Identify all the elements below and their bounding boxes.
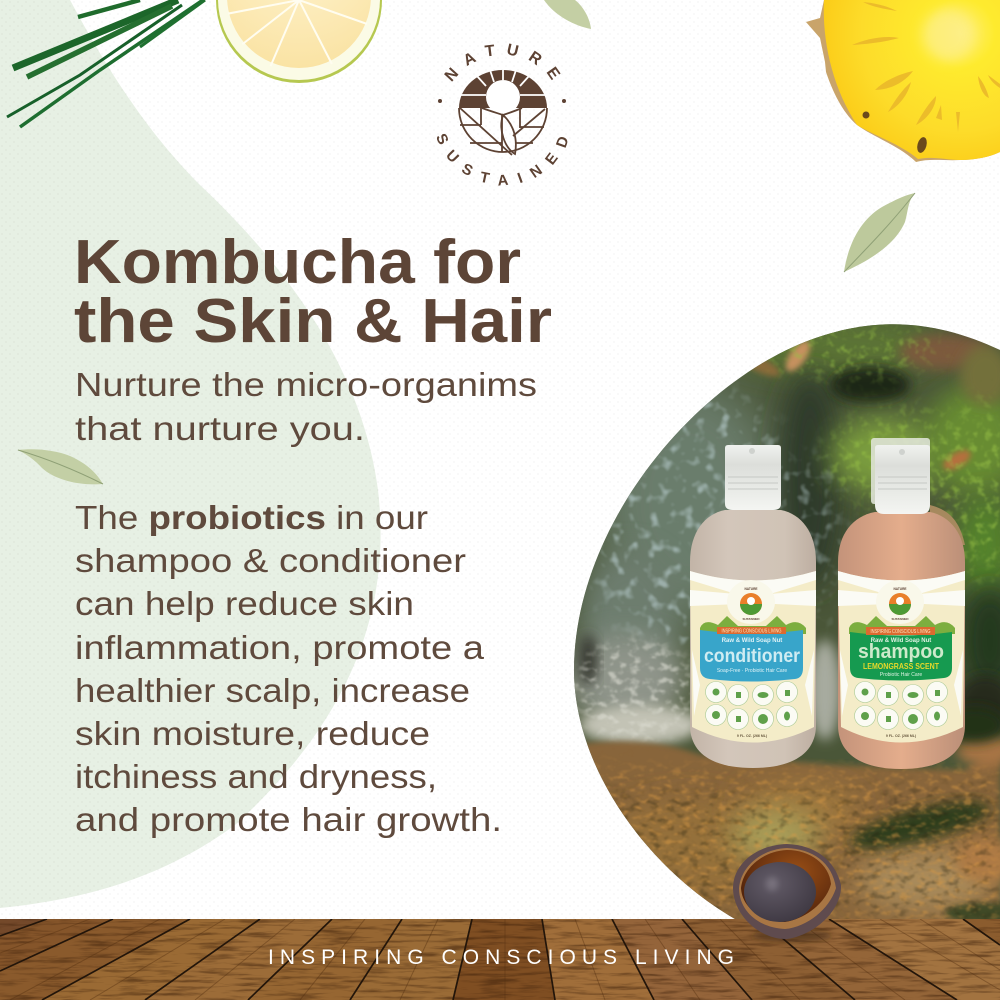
shampoo foliage [849, 616, 955, 634]
shampoo badges [854, 682, 948, 730]
heading: Kombucha for [74, 228, 521, 297]
shampoo orange strip [866, 627, 935, 635]
pale green curved shape [0, 0, 381, 908]
bottle: conditioner: Raw & Wild Soap Nut [722, 638, 782, 644]
logo wordmark: NATURE [444, 44, 560, 82]
body text [75, 499, 502, 838]
bottle: shampoo: INSPIRING CONSCIOUS LIVING [870, 629, 931, 635]
leaf: top centre [544, 0, 591, 29]
leaf: right [844, 193, 915, 272]
conditioner label [690, 571, 816, 742]
photo moss texture [760, 325, 1000, 580]
heading [74, 228, 552, 356]
shampoo ghost backing [871, 438, 965, 545]
plank gaps [0, 919, 1000, 1000]
photo rock [570, 707, 1000, 925]
conditioner mini logo [740, 587, 762, 621]
body text: healthier scalp, increase [75, 672, 470, 709]
photo splashing water [565, 634, 841, 745]
bottle: shampoo: 9 FL. OZ. (266 ML) [886, 734, 916, 738]
body text: The probiotics in our [75, 499, 428, 536]
bottle: conditioner: Soap-Free · Probiotic Hair Care [717, 668, 787, 674]
photo foliage and bokeh [580, 315, 1000, 735]
conditioner foliage [700, 616, 806, 634]
shampoo green band [850, 632, 952, 680]
conditioner badges [706, 682, 798, 730]
lemongrass blades [7, 0, 205, 127]
heading: the Skin & Hair [74, 287, 552, 356]
conditioner blue band [700, 630, 803, 682]
bottle: shampoo: shampoo [858, 641, 944, 663]
shampoo cap [875, 445, 930, 514]
soap nut [733, 844, 841, 942]
photo: mossy rock and water [560, 310, 1000, 925]
body text: and promote hair growth. [75, 801, 502, 838]
wood planks [0, 919, 1000, 1000]
logo lower wordmark: SUSTAINED [437, 134, 568, 186]
bottle: shampoo [838, 438, 965, 769]
body text: can help reduce skin [75, 585, 414, 622]
leaf: left [18, 449, 103, 484]
wood grain streaks [0, 919, 1000, 1000]
conditioner cap [725, 445, 781, 510]
pineapple slits [852, 2, 1000, 132]
shampoo body [838, 512, 965, 769]
body text: itchiness and dryness, [75, 758, 437, 795]
logo: Nature Sustained [437, 44, 568, 186]
bottle: conditioner: 9 FL. OZ. (266 ML) [737, 734, 767, 738]
bottle: conditioner: INSPIRING CONSCIOUS LIVING [722, 628, 782, 634]
logo emblem [455, 70, 551, 155]
photo pale bokeh dots [585, 385, 795, 655]
subheading: Nurture the micro-organims [75, 366, 537, 403]
bottle: shampoo: LEMONGRASS SCENT [863, 662, 939, 671]
logo separator dots [438, 99, 566, 103]
body text: skin moisture, reduce [75, 715, 430, 752]
wooden floor [0, 919, 1000, 1000]
body text: inflammation, promote a [75, 629, 485, 666]
shampoo label [838, 571, 965, 742]
pineapple dark eyes [862, 112, 928, 154]
pineapple slice [806, 0, 1000, 162]
conditioner body [690, 510, 816, 768]
conditioner mini logo: NATURE [744, 587, 758, 591]
body text: shampoo & conditioner [75, 542, 466, 579]
subheading [75, 366, 537, 447]
subheading: that nurture you. [75, 410, 365, 447]
bottle: conditioner: conditioner [704, 646, 801, 667]
shampoo mini logo: SUSTAINED [891, 617, 909, 621]
photo rock texture [580, 765, 1000, 920]
tagline: INSPIRING CONSCIOUS LIVING [268, 946, 734, 969]
conditioner orange strip [717, 627, 786, 634]
conditioner mini logo: SUSTAINED [742, 617, 760, 621]
lemon slice [216, 0, 382, 83]
bottle: shampoo: Raw & Wild Soap Nut [871, 638, 931, 644]
bottle: conditioner [690, 445, 816, 768]
shampoo mini logo [889, 587, 911, 621]
bottle: shampoo: Probiotic Hair Care [880, 672, 922, 678]
shampoo mini logo: NATURE [893, 587, 907, 591]
